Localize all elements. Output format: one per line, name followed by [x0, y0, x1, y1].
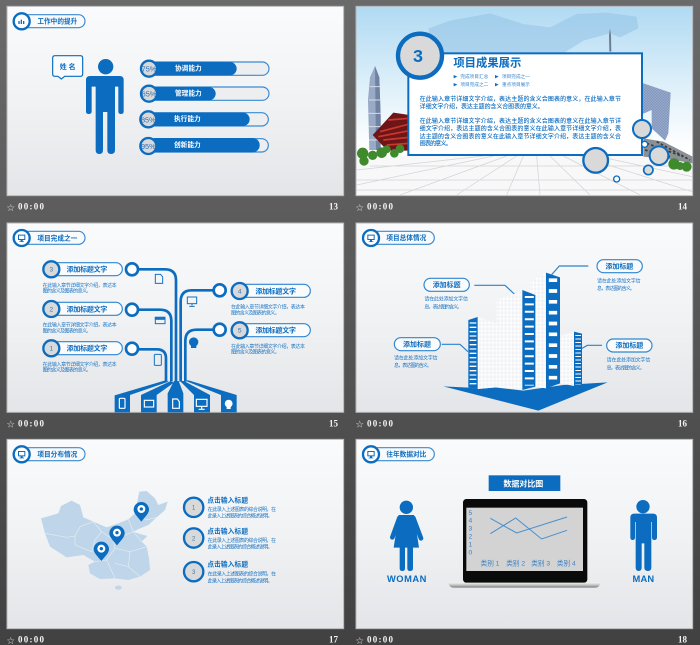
item 2	[184, 526, 276, 551]
progress bar: 95%: 创新能力	[174, 140, 201, 149]
axis labels: 3	[468, 526, 472, 533]
leader lines	[442, 266, 602, 352]
ground arrow	[443, 382, 608, 411]
icon: woman: WOMAN	[387, 574, 427, 584]
label: top right: 添加标题	[605, 261, 633, 270]
icon: person	[86, 59, 124, 154]
label: right: 添加标题	[615, 341, 643, 350]
paragraph 2	[420, 117, 621, 148]
footer	[355, 635, 687, 645]
item 2: 图的含义及图表的意义。	[43, 327, 91, 334]
chart title	[489, 475, 560, 491]
footer: 13	[329, 202, 338, 212]
slide 13: work improvement	[6, 6, 344, 214]
footer: 00:00	[18, 635, 44, 645]
item 2: 点击输入标题	[207, 526, 248, 535]
progress bar: 95%: 95%	[141, 142, 156, 151]
label: right: 息，表达图的含义。	[607, 364, 645, 371]
footer: 00:00	[367, 418, 393, 428]
item 3: 此录入上述图表的综合概述说明。	[208, 577, 273, 584]
heading badge	[14, 446, 85, 462]
heading badge	[363, 446, 434, 462]
red pavilion	[373, 113, 409, 151]
item 2: 此录入上述图表的综合概述说明。	[208, 544, 273, 551]
footer: 00:00	[18, 202, 44, 212]
axis labels: 2	[468, 533, 472, 540]
paragraph 2: 细文字介绍，表达主题的含义合图表的意义在此输入章节详细文字介绍，表	[420, 125, 621, 133]
label: left: 添加标题	[403, 339, 431, 348]
item 4: 4	[238, 288, 242, 295]
item 1: 在此录入上述图表的综合说明，在	[208, 506, 276, 513]
heading badge	[14, 13, 85, 29]
item 5: 在此输入章节详细文字介绍，表达本	[231, 343, 305, 350]
label: top right: 请在此处添加文字信	[597, 277, 641, 284]
footer: 14	[678, 202, 687, 212]
footer: ☆	[6, 203, 15, 214]
map of China	[41, 491, 168, 590]
item 2	[43, 301, 138, 334]
footer: 00:00	[367, 635, 393, 645]
label: right: 请在此处添加文字信	[607, 357, 650, 364]
footer: 00:00	[18, 418, 44, 428]
bullet list: 完成项目汇总	[460, 73, 489, 80]
bullet list: 重点项目展示	[502, 81, 530, 88]
footer: ☆	[355, 203, 364, 214]
axis labels: 1	[468, 541, 472, 548]
item 5: 添加标题文字	[255, 326, 296, 335]
footer: ☆	[355, 420, 364, 431]
item 2: 2	[49, 306, 53, 313]
slide 18: yearly data comparison	[355, 439, 693, 645]
item 1	[184, 496, 276, 520]
section title: 项目成果展示	[453, 55, 521, 69]
item 3: 在此输入章节详细文字介绍，表达本	[43, 282, 117, 289]
item 1: 在此输入章节详细文字介绍，表达本	[43, 361, 117, 368]
label: right	[607, 339, 652, 371]
tower	[368, 66, 381, 150]
paragraph 1: 详细文字介绍，表达主题的含义合图表的意义。	[420, 103, 544, 111]
chart lines	[490, 517, 567, 539]
progress bar: 65%	[141, 86, 269, 102]
item 3	[184, 560, 276, 584]
axis labels: 类别 3	[531, 559, 550, 568]
label: top left	[424, 278, 469, 310]
heading badge	[14, 230, 85, 246]
progress bar: 75%: 75%	[142, 65, 157, 74]
icon: man	[630, 500, 657, 584]
label: top left: 添加标题	[433, 280, 461, 289]
axis labels: 5	[468, 510, 472, 517]
axis labels: 类别 4	[557, 559, 576, 568]
axis labels: 类别 2	[506, 559, 525, 568]
axis labels: 类别 1	[481, 559, 500, 568]
connector lines	[138, 269, 214, 382]
item 3: 在此录入上述图表的综合说明，在	[208, 571, 276, 578]
progress bar: 65%: 管理能力	[175, 88, 202, 97]
progress bar: 65%: 65%	[142, 90, 157, 99]
footer: 15	[329, 418, 338, 428]
label: top left: 请在此处添加文字信	[424, 296, 468, 303]
heading badge	[363, 230, 434, 246]
heading badge: 项目总体情况	[386, 233, 427, 242]
callout: name	[53, 56, 83, 79]
world map backdrop	[428, 13, 638, 53]
icon: woman	[387, 501, 427, 584]
building group	[468, 273, 582, 390]
chart title: 数据对比图	[503, 479, 543, 489]
item 1: 图的含义及图表的意义。	[43, 367, 91, 374]
map pins	[94, 502, 149, 561]
item 1	[43, 340, 138, 374]
right building	[641, 83, 693, 163]
progress bar: 95%	[140, 138, 268, 154]
tab icons	[119, 398, 232, 409]
label: top right	[597, 260, 642, 292]
item 1: 1	[192, 506, 196, 512]
footer	[6, 202, 338, 214]
bullet list: 项目完成之二	[460, 81, 489, 88]
heading badge: 工作中的提升	[37, 17, 78, 26]
trees left	[357, 144, 404, 166]
heading badge: 项目分布情况	[37, 450, 78, 459]
item 1: 此录入上述图表的综合概述说明。	[208, 513, 273, 520]
progress bar: 85%: 执行能力	[174, 114, 201, 123]
label: left: 息，表达图的含义。	[394, 362, 432, 369]
heading badge: 往年数据对比	[386, 449, 427, 458]
decorative bubbles	[583, 120, 668, 182]
progress bar: 85%	[140, 111, 268, 127]
item 4: 添加标题文字	[255, 286, 296, 295]
item 4: 在此输入章节详细文字介绍，表达本	[231, 304, 305, 311]
progress bar: 75%: 协调能力	[175, 63, 202, 72]
spire	[609, 28, 611, 52]
item 4: 图的含义及图表的意义。	[231, 309, 280, 316]
item 3: 添加标题文字	[67, 265, 107, 274]
axis labels	[468, 510, 576, 568]
item 5: 5	[238, 328, 242, 335]
footer: 16	[678, 418, 687, 428]
progress bar: 85%: 85%	[141, 115, 156, 124]
icon: man: MAN	[632, 574, 654, 584]
label: left	[394, 338, 440, 369]
item 1: 添加标题文字	[67, 344, 107, 353]
footer: 00:00	[367, 202, 393, 212]
bullet list: 项目完成之一	[502, 73, 530, 80]
item 2: 在此输入章节详细文字介绍，表达本	[43, 322, 117, 329]
footer: 17	[329, 635, 338, 645]
small icons beside lines	[154, 274, 198, 365]
item 4	[214, 283, 310, 316]
laptop with line chart	[449, 499, 600, 588]
number badge 3: 3	[413, 46, 423, 66]
heading badge: 项目完成之一	[37, 233, 78, 242]
item 2: 添加标题文字	[67, 304, 107, 313]
item 3	[43, 261, 138, 295]
item 5: 图的含义及图表的意义。	[231, 349, 280, 356]
label: top left: 息，表达图的含义。	[424, 303, 462, 310]
paragraph 2: 图表的意义。	[420, 140, 452, 148]
slide 16: buildings	[355, 223, 693, 431]
footer: ☆	[6, 420, 15, 431]
item 3: 点击输入标题	[207, 560, 248, 569]
item 1: 1	[49, 346, 53, 353]
label: top right: 息，表达图的含义。	[597, 285, 635, 292]
fan tabs	[115, 380, 237, 412]
slide 14: project results	[355, 6, 693, 214]
tiled floor	[357, 156, 692, 195]
bullet list	[454, 73, 530, 88]
axis labels: 4	[468, 518, 472, 525]
label: left: 请在此处添加文字信	[394, 354, 438, 361]
slide 15: tree diagram	[6, 223, 344, 431]
footer	[355, 418, 687, 431]
item 5	[214, 322, 310, 356]
trees right	[668, 158, 692, 172]
item 3: 图的含义及图表的意义。	[43, 288, 91, 295]
footer	[355, 202, 687, 214]
item 2: 在此录入上述图表的综合说明，在	[208, 537, 276, 544]
footer	[6, 418, 338, 431]
callout: name: 姓 名	[60, 62, 76, 71]
item 3: 3	[192, 570, 196, 576]
item 1: 点击输入标题	[207, 496, 248, 505]
footer: 18	[678, 635, 687, 645]
paragraph 1	[420, 95, 621, 111]
paragraph 1: 在此输入章节详细文字介绍，表达主题的含义合图表的意义，在此输入章节	[420, 95, 621, 103]
paragraph 2: 在此输入章节详细文字介绍，表达主题的含义合图表的意义在此输入章节详	[420, 117, 621, 125]
content panel	[408, 53, 642, 155]
axis labels: 0	[468, 549, 472, 556]
slide 17: project distribution	[6, 439, 344, 645]
footer	[6, 635, 338, 645]
number badge 3	[398, 34, 442, 78]
paragraph 2: 达主题的含义合图表的意义在此输入章节详细文字介绍，表达主题的含义合	[420, 132, 621, 140]
item 3: 3	[49, 267, 53, 274]
item 2: 2	[192, 536, 196, 542]
progress bar: 75%	[141, 61, 269, 77]
